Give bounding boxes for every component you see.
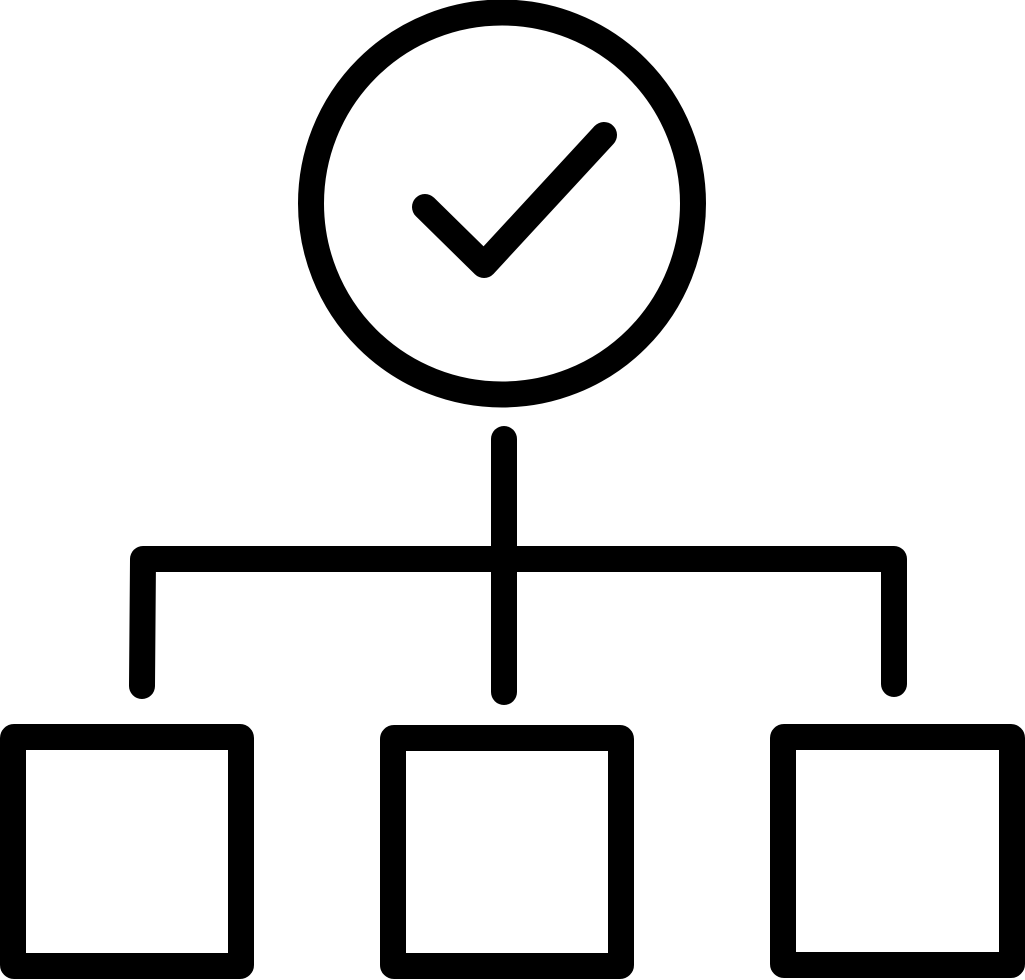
box: left: [13, 737, 241, 966]
box: right: [783, 737, 1012, 965]
connector: tree lines: [142, 439, 894, 692]
icon: circle with check mark: [311, 12, 693, 394]
box: middle: [393, 738, 621, 966]
